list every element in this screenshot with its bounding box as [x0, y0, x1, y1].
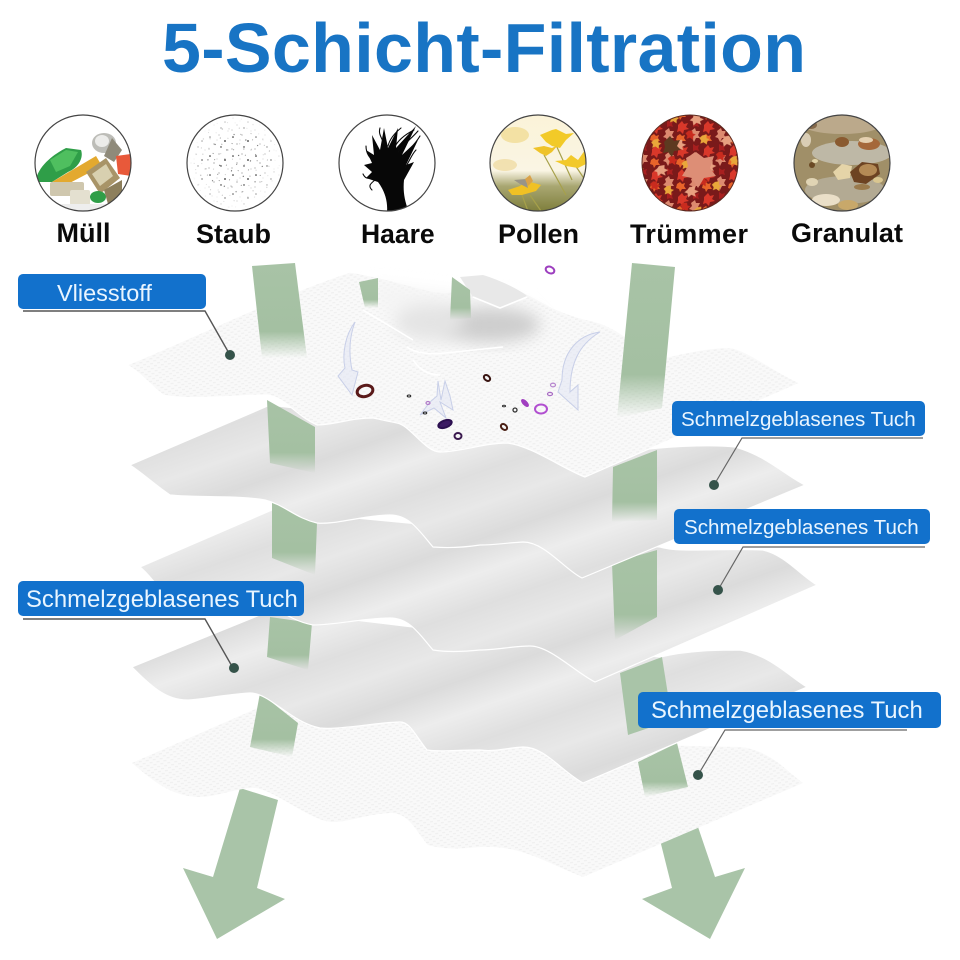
icon: Pollen: [490, 115, 586, 211]
label: Pollen: Pollen: [498, 219, 579, 249]
callout: Schmelzgeblasenes Tuch (right 3): [638, 692, 941, 780]
flow strips over layer 4: [267, 617, 672, 735]
callout: Vliesstoff: [18, 274, 235, 360]
label: Haare: Haare: [361, 219, 435, 249]
label: Trümmer: Trümmer: [630, 219, 748, 249]
label: Staub: Staub: [196, 219, 271, 249]
layer 1: top non-woven fabric: [127, 272, 800, 477]
top folds of fabric: [363, 275, 540, 375]
arrow: left output: [183, 788, 285, 939]
icon: Haare: [339, 115, 435, 212]
layer 3: melt-blown cloth: [140, 510, 817, 682]
layer 4: melt-blown cloth: [132, 610, 807, 783]
arrow: right output: [642, 827, 745, 939]
curved airflow arrows: [338, 322, 600, 418]
icon: Trümmer: [642, 115, 738, 211]
callout: Schmelzgeblasenes Tuch (right 1): Schmelzgeblasenes Tuch: [681, 408, 916, 431]
icon: Granulat: [794, 114, 892, 211]
icon: Müll: [35, 115, 132, 214]
layer 2: melt-blown cloth: [130, 405, 805, 578]
flow strip: left top: [252, 263, 307, 358]
flow strip: right top: [617, 263, 675, 418]
layer 5: bottom fabric: [132, 707, 803, 877]
callout: Schmelzgeblasenes Tuch (left): Schmelzgeblasenes Tuch: [26, 586, 298, 613]
callout: Schmelzgeblasenes Tuch (right 2): Schmelzgeblasenes Tuch: [684, 516, 919, 539]
callout: Schmelzgeblasenes Tuch (left): [18, 581, 304, 673]
flow strips over layer 5: [250, 693, 688, 797]
callout: Schmelzgeblasenes Tuch (right 3): Schmelzgeblasenes Tuch: [651, 697, 923, 724]
label: Müll: Müll: [56, 218, 110, 248]
title: 5-Schicht-Filtration: [162, 9, 806, 87]
callout: Schmelzgeblasenes Tuch (right 1): [672, 401, 925, 490]
label: Granulat: Granulat: [791, 218, 903, 248]
icon: Staub: [187, 115, 283, 211]
callout: Schmelzgeblasenes Tuch (right 2): [674, 509, 930, 595]
strip segments entering small top folds: [359, 277, 471, 320]
filtered particles: [356, 265, 556, 439]
flow strips over layer 3: [272, 493, 657, 640]
flow strips over layer 2: [267, 400, 657, 522]
callout: Vliesstoff: Vliesstoff: [57, 280, 152, 306]
